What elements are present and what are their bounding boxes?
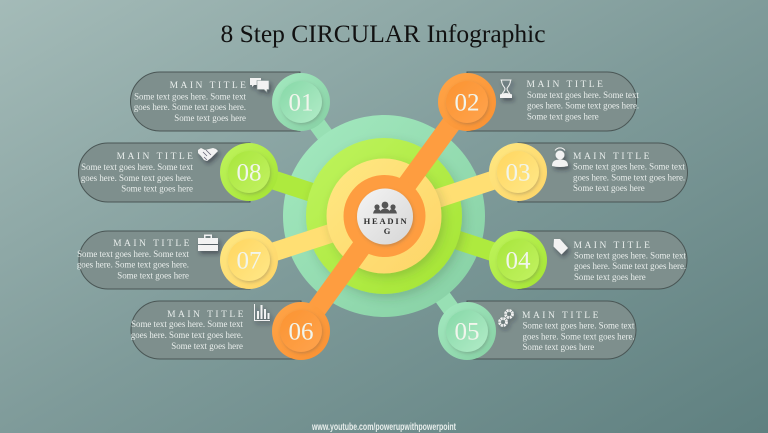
step title: MAIN TITLE	[167, 310, 246, 320]
step text: Some text goes here	[171, 341, 243, 351]
step text: Some text goes here. Some text	[574, 250, 686, 260]
step text: Some text goes here	[573, 183, 645, 193]
step text: goes here. Some text goes here.	[131, 330, 243, 340]
number badge: 02	[454, 90, 480, 116]
panel: step 08	[78, 143, 278, 202]
step text: Some text goes here	[574, 272, 646, 282]
number badge	[220, 231, 278, 289]
number badge	[438, 302, 496, 360]
step text: Some text goes here	[527, 112, 599, 122]
step text: Some text goes here. Some text	[522, 320, 635, 330]
yellow ring	[326, 158, 442, 274]
heading label: G	[384, 226, 392, 236]
icon: tag	[554, 239, 568, 254]
step title: MAIN TITLE	[113, 239, 192, 249]
step text: goes here. Some text goes here.	[574, 261, 686, 271]
step text: Some text goes here. Some text	[131, 319, 244, 329]
outer green ring	[283, 115, 485, 317]
step text: Some text goes here. Some text	[527, 90, 639, 100]
lime ring	[306, 138, 462, 294]
step text: Some text goes here	[174, 113, 246, 123]
step text: goes here. Some text goes here.	[77, 260, 189, 270]
step text: Some text goes here. Some text	[134, 92, 247, 102]
number badge: 08	[236, 160, 262, 186]
number badge	[438, 73, 496, 131]
spokes: steps 1 and 5	[301, 102, 467, 331]
title: 8 Step CIRCULAR Infographic	[220, 19, 546, 48]
panel: step 02	[438, 72, 639, 131]
pill	[78, 143, 250, 202]
panel: step 01	[130, 72, 330, 131]
central circular diagram	[249, 102, 518, 331]
pill	[518, 143, 688, 202]
panel: step 07	[77, 231, 278, 289]
icon: support person	[552, 148, 568, 167]
pill	[130, 72, 300, 131]
icon: handshake	[198, 148, 218, 161]
footer url: www.youtube.com/powerupwithpowerpoint	[311, 422, 456, 433]
step title: MAIN TITLE	[573, 152, 652, 162]
number badge	[272, 302, 330, 360]
orange ring	[344, 175, 426, 257]
step text: Some text goes here	[121, 184, 193, 194]
step title: MAIN TITLE	[170, 81, 248, 91]
number badge	[272, 73, 330, 131]
pill	[467, 72, 636, 131]
step text: goes here. Some text goes here.	[81, 173, 193, 183]
step text: Some text goes here	[522, 342, 594, 352]
panel: step 04	[489, 231, 687, 289]
number badge: 07	[236, 248, 262, 274]
step text: goes here. Some text goes here.	[134, 102, 246, 112]
spokes: steps 3 and 7	[249, 172, 518, 260]
pill	[518, 231, 687, 289]
icon: bar chart	[254, 304, 270, 321]
step text: Some text goes here	[117, 270, 189, 280]
step text: goes here. Some text goes here.	[527, 100, 639, 110]
number badge: 01	[288, 90, 314, 116]
number badge	[489, 231, 547, 289]
step title: MAIN TITLE	[117, 152, 196, 162]
panel: step 05	[438, 301, 636, 360]
icon: speech bubbles	[250, 78, 269, 92]
step text: goes here. Some text goes here.	[522, 332, 635, 342]
center white disc	[357, 188, 413, 244]
number badge: 03	[506, 160, 530, 186]
heading label: HEADIN	[364, 216, 408, 226]
icon: hourglass	[500, 80, 512, 98]
number badge	[220, 143, 278, 201]
icon: briefcase	[198, 234, 218, 251]
number badge: 04	[506, 248, 531, 274]
step text: goes here. Some text goes here.	[573, 172, 685, 182]
number badge: 05	[454, 318, 480, 346]
step text: Some text goes here. Some text	[81, 162, 194, 172]
step title: MAIN TITLE	[574, 241, 652, 251]
spokes: steps 4 and 8	[249, 172, 518, 260]
spokes: steps 2 and 6	[301, 102, 467, 331]
step text: Some text goes here. Some text	[573, 162, 685, 172]
icon: team	[373, 202, 397, 214]
step title: MAIN TITLE	[522, 311, 601, 321]
panel: step 03	[489, 143, 688, 202]
number badge: 06	[288, 318, 314, 346]
number badge	[489, 143, 547, 201]
pill	[131, 301, 301, 359]
panel: step 06	[131, 301, 330, 360]
step text: Some text goes here. Some text	[77, 249, 190, 259]
pill	[79, 231, 250, 289]
icon: gears	[500, 310, 512, 326]
pill	[467, 301, 636, 359]
step title: MAIN TITLE	[526, 80, 605, 90]
